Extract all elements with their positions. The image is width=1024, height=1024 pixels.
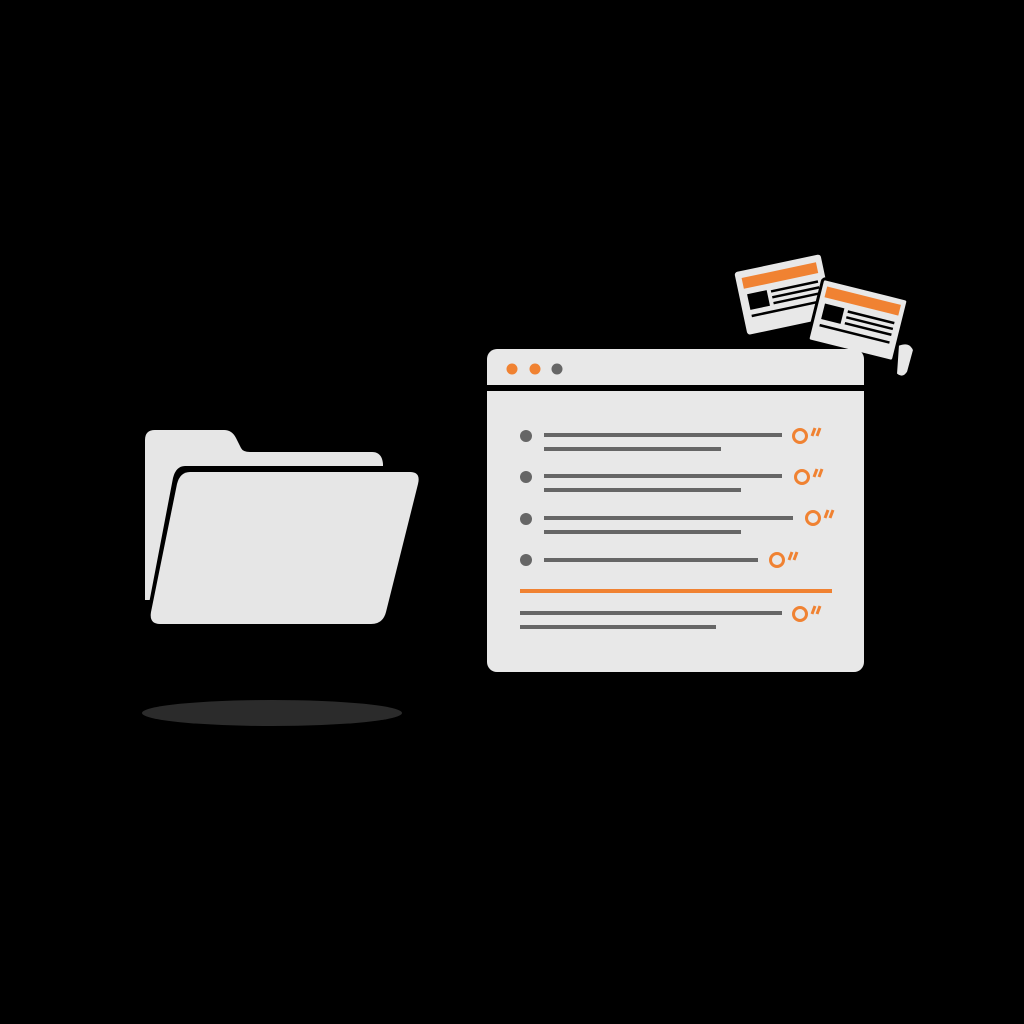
list rows	[520, 430, 793, 629]
panel: browser window	[487, 349, 864, 672]
window dots	[506, 364, 562, 374]
quote markers	[770, 428, 833, 620]
icon: folder shadow	[142, 700, 402, 726]
icon: folder	[145, 430, 421, 628]
orange divider	[520, 589, 832, 593]
icon: newspapers	[734, 254, 914, 377]
